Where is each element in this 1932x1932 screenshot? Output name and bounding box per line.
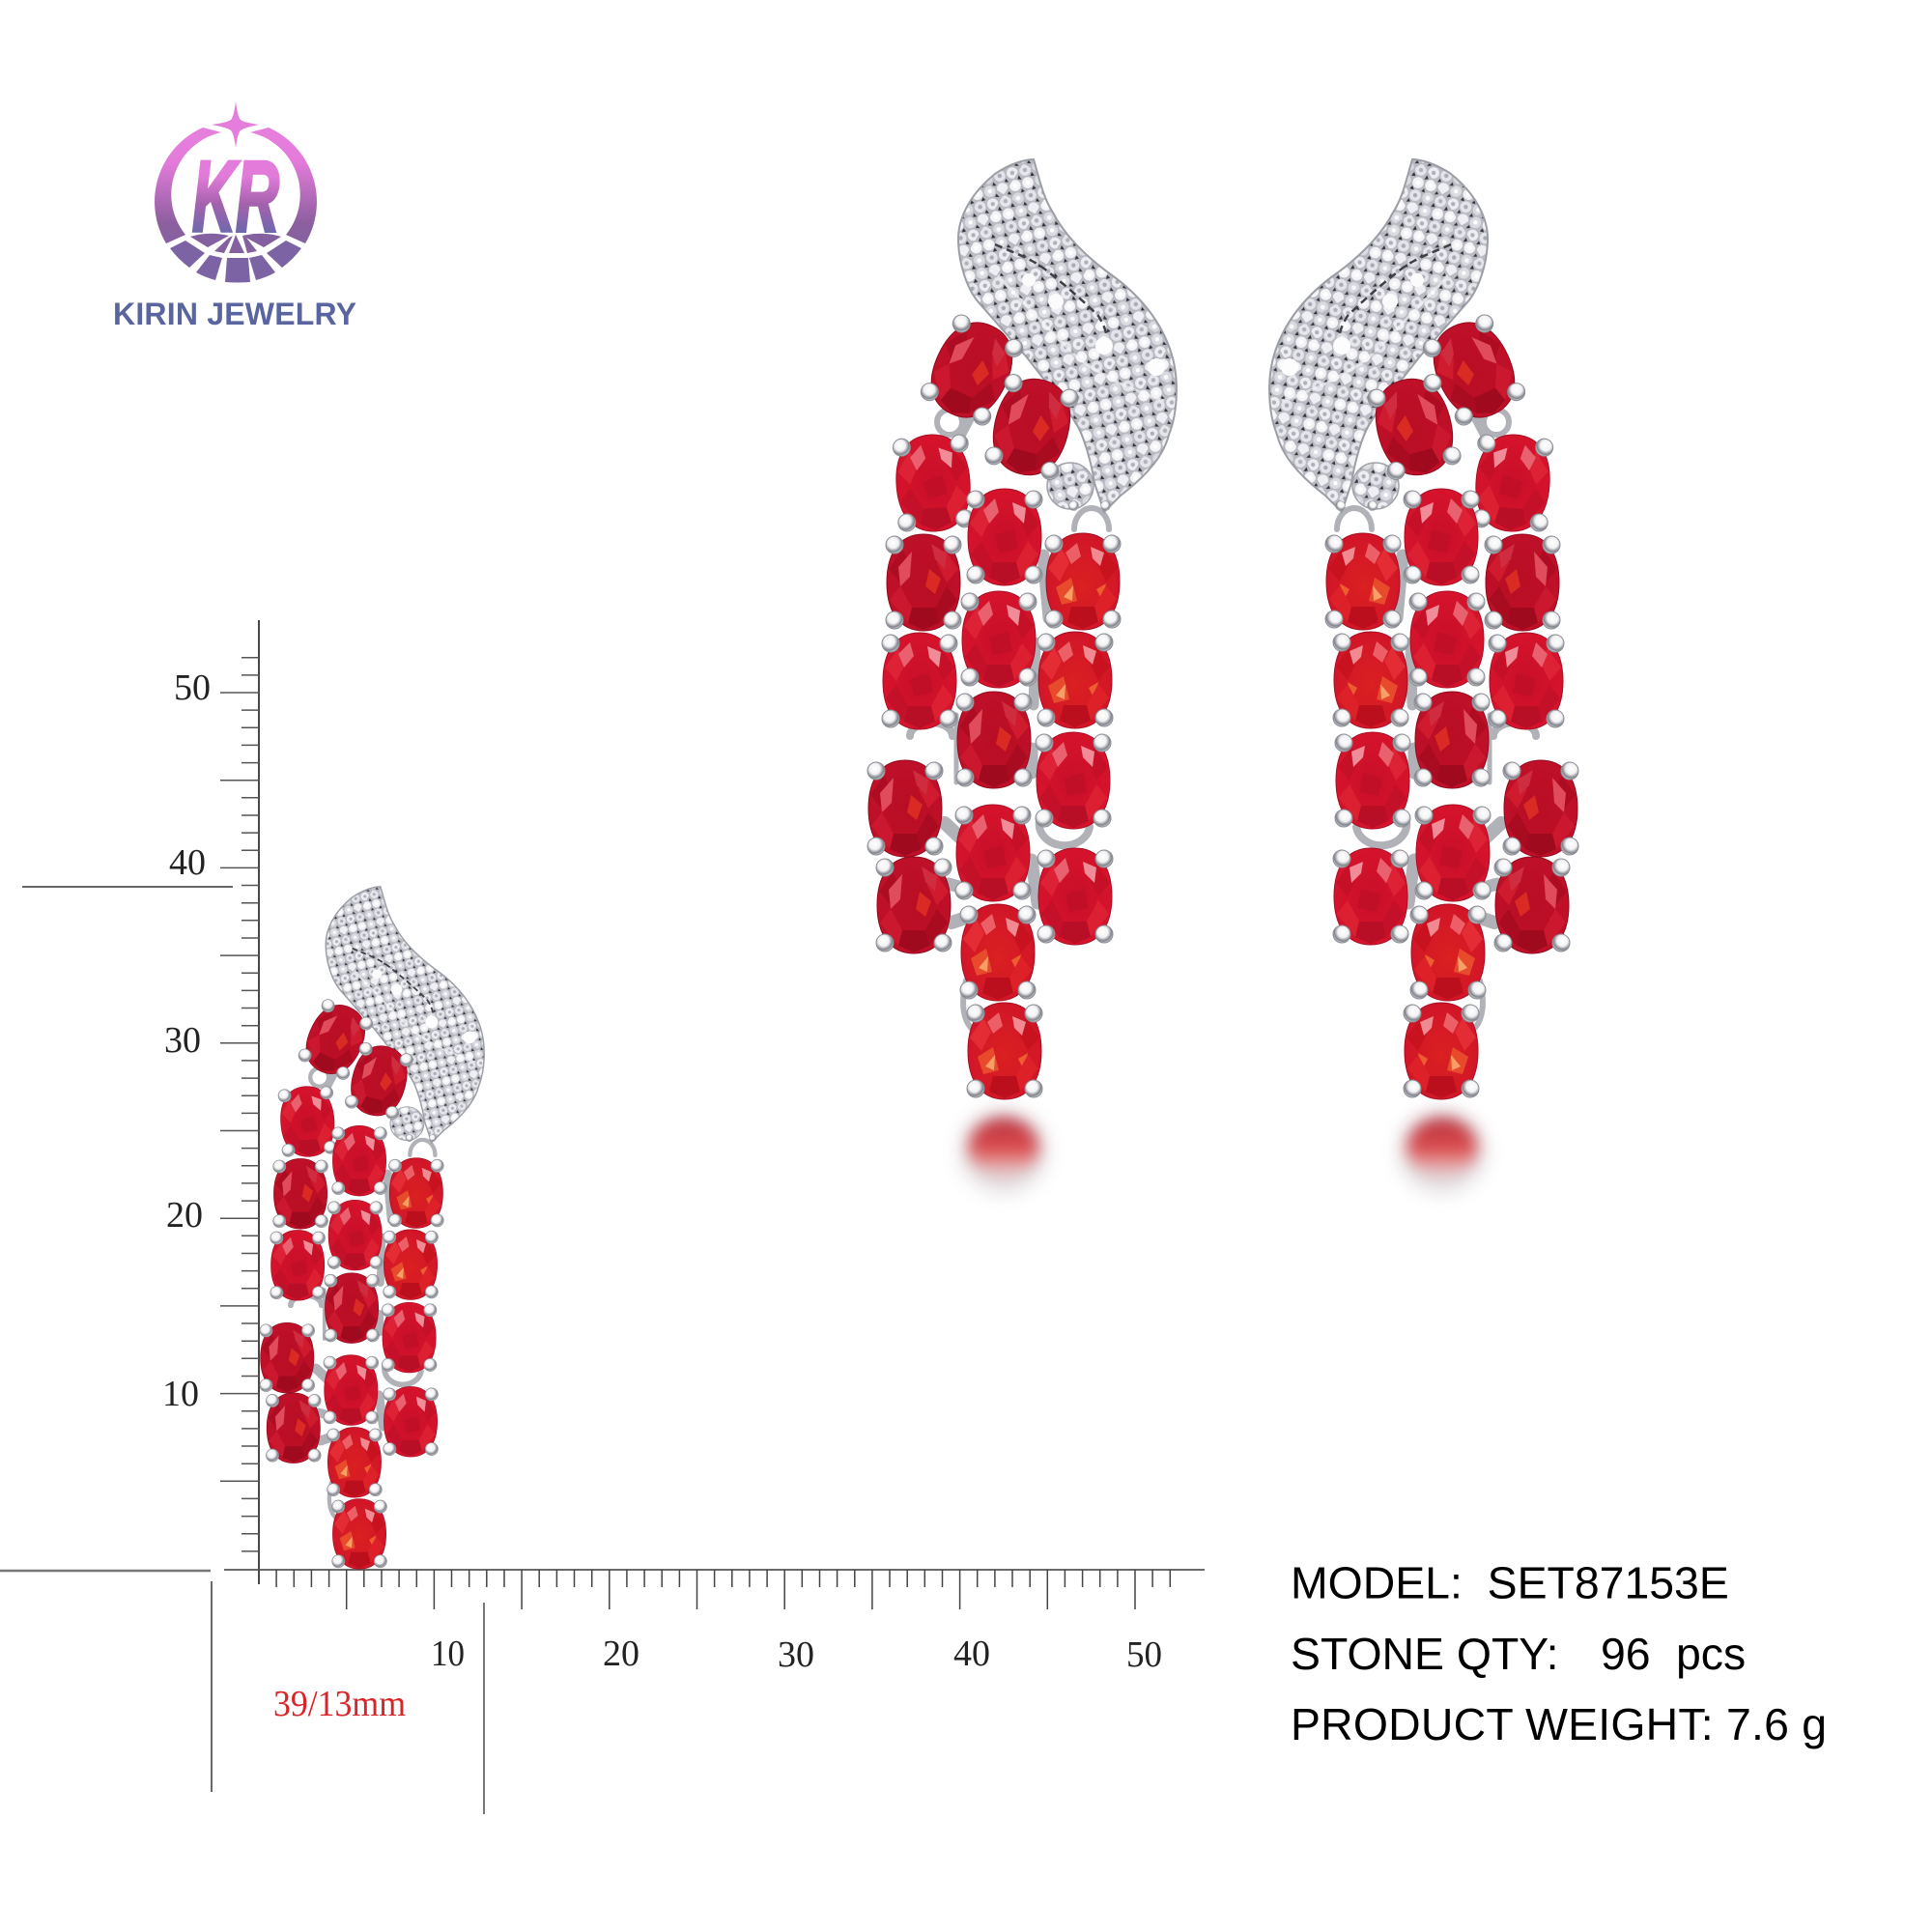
- product weight: PRODUCT WEIGHT: 7.6 g: [1291, 1699, 1827, 1749]
- horizontal ruler labels: 20: [603, 1634, 639, 1674]
- reflection: right earring: [1400, 1111, 1485, 1192]
- horizontal ruler labels: 10: [431, 1634, 465, 1674]
- horizontal ruler labels: 30: [778, 1634, 814, 1675]
- horizontal ruler labels: [431, 1634, 1162, 1675]
- logo monogram: KR: [192, 141, 279, 253]
- horizontal ruler: [224, 1570, 1205, 1675]
- icon: globe segments: [170, 234, 301, 282]
- icon: logo ring: [155, 128, 317, 243]
- stone quantity: 96: [1601, 1629, 1651, 1679]
- horizontal ruler labels: 40: [953, 1634, 990, 1674]
- product specifications: [1291, 1557, 1827, 1749]
- earring: small, scaled against ruler: [260, 887, 484, 1569]
- vertical ruler labels: 20: [166, 1195, 203, 1236]
- brand name: KIRIN JEWELRY: [113, 297, 356, 331]
- vertical ruler labels: 40: [169, 842, 206, 883]
- stone quantity: pcs: [1676, 1629, 1746, 1679]
- icon: four point star: [212, 101, 259, 148]
- reflection: left earring: [961, 1111, 1046, 1192]
- measurement guide lines: [0, 887, 484, 1814]
- vertical ruler labels: 30: [164, 1020, 201, 1061]
- vertical ruler: [162, 620, 259, 1584]
- vertical ruler labels: 10: [162, 1374, 199, 1414]
- logo: Kirin Jewelry: [113, 101, 356, 331]
- model number: MODEL: SET87153E: [1291, 1557, 1729, 1607]
- vertical ruler labels: [162, 668, 211, 1414]
- earring: left, large product photo: [867, 159, 1177, 1099]
- horizontal ruler labels: 50: [1126, 1634, 1162, 1675]
- stone quantity: STONE QTY:: [1291, 1629, 1559, 1679]
- vertical ruler labels: 50: [174, 668, 211, 708]
- earring: right, large product photo (mirrored): [1269, 159, 1578, 1099]
- dimension label: 39/13mm: [273, 1684, 406, 1724]
